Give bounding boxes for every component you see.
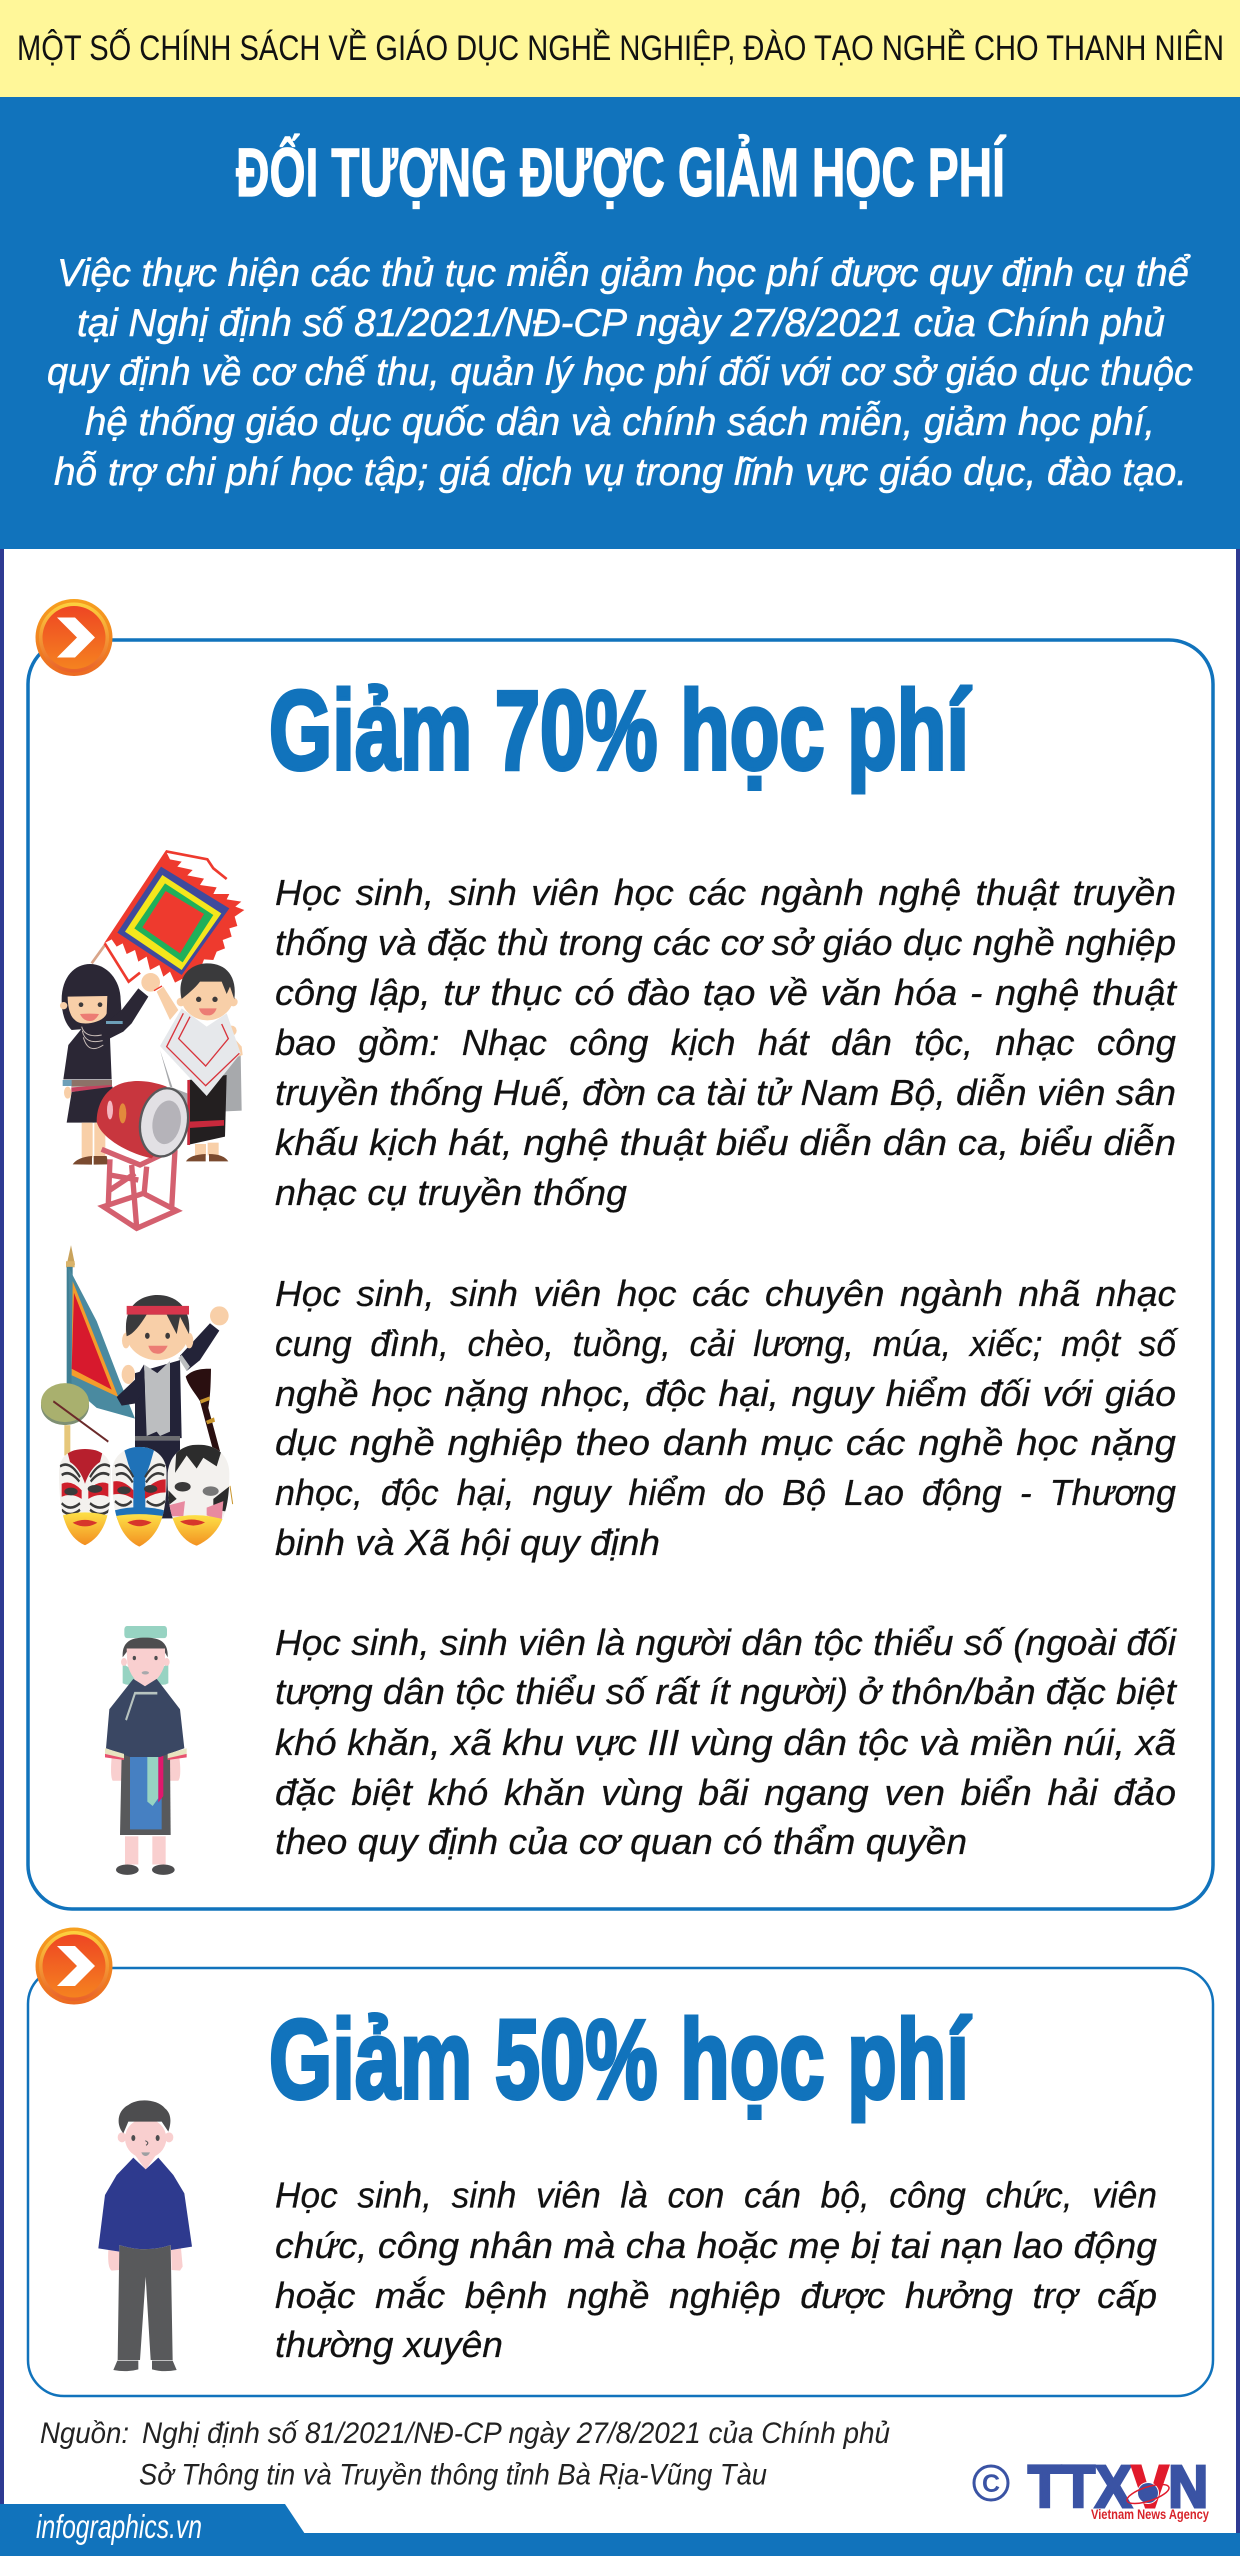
text block: second eligible group: cung đình, chèo, tuồng, cải lương, múa, xiếc; một số bbox=[275, 1323, 1179, 1364]
panel: 50 percent reduction bbox=[28, 1968, 1213, 2396]
illustration: children with flag and drum bbox=[60, 851, 244, 1228]
text block: fourth eligible group bbox=[275, 2174, 1157, 2365]
boy bbox=[157, 987, 178, 1020]
text block: first eligible group: nhạc cụ truyền thống bbox=[275, 1172, 627, 1213]
grey cloak bbox=[160, 1050, 242, 1113]
text block: first eligible group: truyền thống Huế, đờn ca tài tử Nam Bộ, diễn viên sân bbox=[275, 1072, 1176, 1113]
drum stand bbox=[102, 1148, 177, 1228]
text block: fourth eligible group: thường xuyên bbox=[275, 2324, 503, 2365]
trumpet bbox=[186, 1369, 220, 1451]
text block: second eligible group: nghề học nặng nhọc, độc hại, nguy hiểm đối với giáo bbox=[275, 1373, 1176, 1414]
text block: first eligible group: công lập, tư thục có đào tạo về văn hóa - nghệ thuật bbox=[275, 972, 1178, 1013]
drum bbox=[97, 1081, 170, 1158]
intro paragraph: hệ thống giáo dục quốc dân và chính sách miễn, giảm học phí, bbox=[85, 400, 1155, 444]
text block: second eligible group: dục nghề nghiệp theo danh mục các nghề học nặng bbox=[275, 1422, 1176, 1463]
text block: fourth eligible group: hoặc mắc bệnh nghề nghiệp được hưởng trợ cấp bbox=[275, 2275, 1157, 2316]
text block: first eligible group: khấu kịch hát, nghệ thuật biểu diễn dân ca, biểu diễn bbox=[275, 1122, 1176, 1163]
illustration: ethnic minority woman bbox=[105, 1626, 187, 1875]
text block: third eligible group: khó khăn, xã khu vực III vùng dân tộc và miền núi, xã bbox=[275, 1722, 1176, 1763]
bottom blue bar with website tab: infographics.vn bbox=[36, 2508, 202, 2545]
heading: giam 70: Giảm 70% học phí bbox=[269, 668, 972, 793]
text block: second eligible group: Học sinh, sinh viên học các chuyên ngành nhã nhạc bbox=[275, 1273, 1176, 1314]
source note: Nghị định số 81/2021/NĐ-CP ngày 27/8/2021 của Chính phủ bbox=[142, 2417, 890, 2450]
intro paragraph: Việc thực hiện các thủ tục miễn giảm học phí được quy định cụ thể bbox=[57, 251, 1191, 295]
masks bbox=[59, 1449, 111, 1546]
text block: second eligible group: binh và Xã hội quy định bbox=[275, 1522, 660, 1563]
text block: third eligible group: tượng dân tộc thiểu số rất ít người) ở thôn/bản đặc biệt bbox=[275, 1671, 1178, 1712]
source note: Sở Thông tin và Truyền thông tỉnh Bà Rịa-Vũng Tàu bbox=[139, 2458, 767, 2492]
text block: third eligible group bbox=[275, 1622, 1178, 1862]
bottom blue bar with website tab bbox=[0, 2504, 1240, 2556]
intro paragraph: quy định về cơ chế thu, quản lý học phí đối với cơ sở giáo dục thuộc bbox=[47, 351, 1193, 394]
text block: fourth eligible group: Học sinh, sinh viên là con cán bộ, công chức, viên bbox=[275, 2174, 1157, 2216]
text block: third eligible group: đặc biệt khó khăn vùng bãi ngang ven biển hải đảo bbox=[275, 1772, 1176, 1813]
source note bbox=[40, 2417, 890, 2492]
logo: TTXVN: TTXVN bbox=[1028, 2454, 1208, 2520]
text block: first eligible group: bao gồm: Nhạc công kịch hát dân tộc, nhạc công bbox=[275, 1022, 1176, 1063]
logo: TTXVN: C bbox=[982, 2470, 1000, 2498]
intro paragraph bbox=[47, 251, 1193, 494]
top banner bbox=[0, 0, 1240, 97]
intro paragraph: hỗ trợ chi phí học tập; giá dịch vụ trong lĩnh vực giáo dục, đào tạo. bbox=[54, 450, 1187, 494]
hand drum bbox=[41, 1386, 89, 1425]
man bbox=[135, 1440, 180, 1518]
text block: fourth eligible group: chức, công nhân mà cha hoặc mẹ bị tai nạn lao động bbox=[275, 2225, 1157, 2266]
heading: giam 50: Giảm 50% học phí bbox=[269, 1997, 972, 2122]
text block: third eligible group: Học sinh, sinh viên là người dân tộc thiểu số (ngoài đối bbox=[275, 1622, 1177, 1663]
girl bbox=[62, 964, 122, 1030]
icon: orange arrow badge 1 bbox=[36, 599, 112, 676]
text block: first eligible group bbox=[275, 872, 1178, 1213]
illustration: man in blue sweater bbox=[98, 2100, 192, 2371]
intro paragraph: tại Nghị định số 81/2021/NĐ-CP ngày 27/8/2021 của Chính phủ bbox=[77, 302, 1165, 345]
text block: second eligible group: nhọc, độc hại, nguy hiểm do Bộ Lao động - Thương bbox=[275, 1472, 1176, 1513]
text block: third eligible group: theo quy định của cơ quan có thẩm quyền bbox=[275, 1821, 967, 1862]
text block: second eligible group bbox=[275, 1273, 1179, 1563]
blue header panel bbox=[0, 97, 1240, 549]
icon: orange arrow badge 2 bbox=[36, 1928, 112, 2004]
text block: first eligible group: Học sinh, sinh viên học các ngành nghệ thuật truyền bbox=[275, 872, 1176, 913]
source note: Nguồn: bbox=[40, 2417, 129, 2450]
logo: TTXVN: Vietnam News Agency bbox=[1091, 2506, 1209, 2522]
text block: first eligible group: thống và đặc thù trong các cơ sở giáo dục nghề nghiệp bbox=[275, 922, 1176, 963]
illustration: performer with banner and masks bbox=[41, 1245, 233, 1549]
